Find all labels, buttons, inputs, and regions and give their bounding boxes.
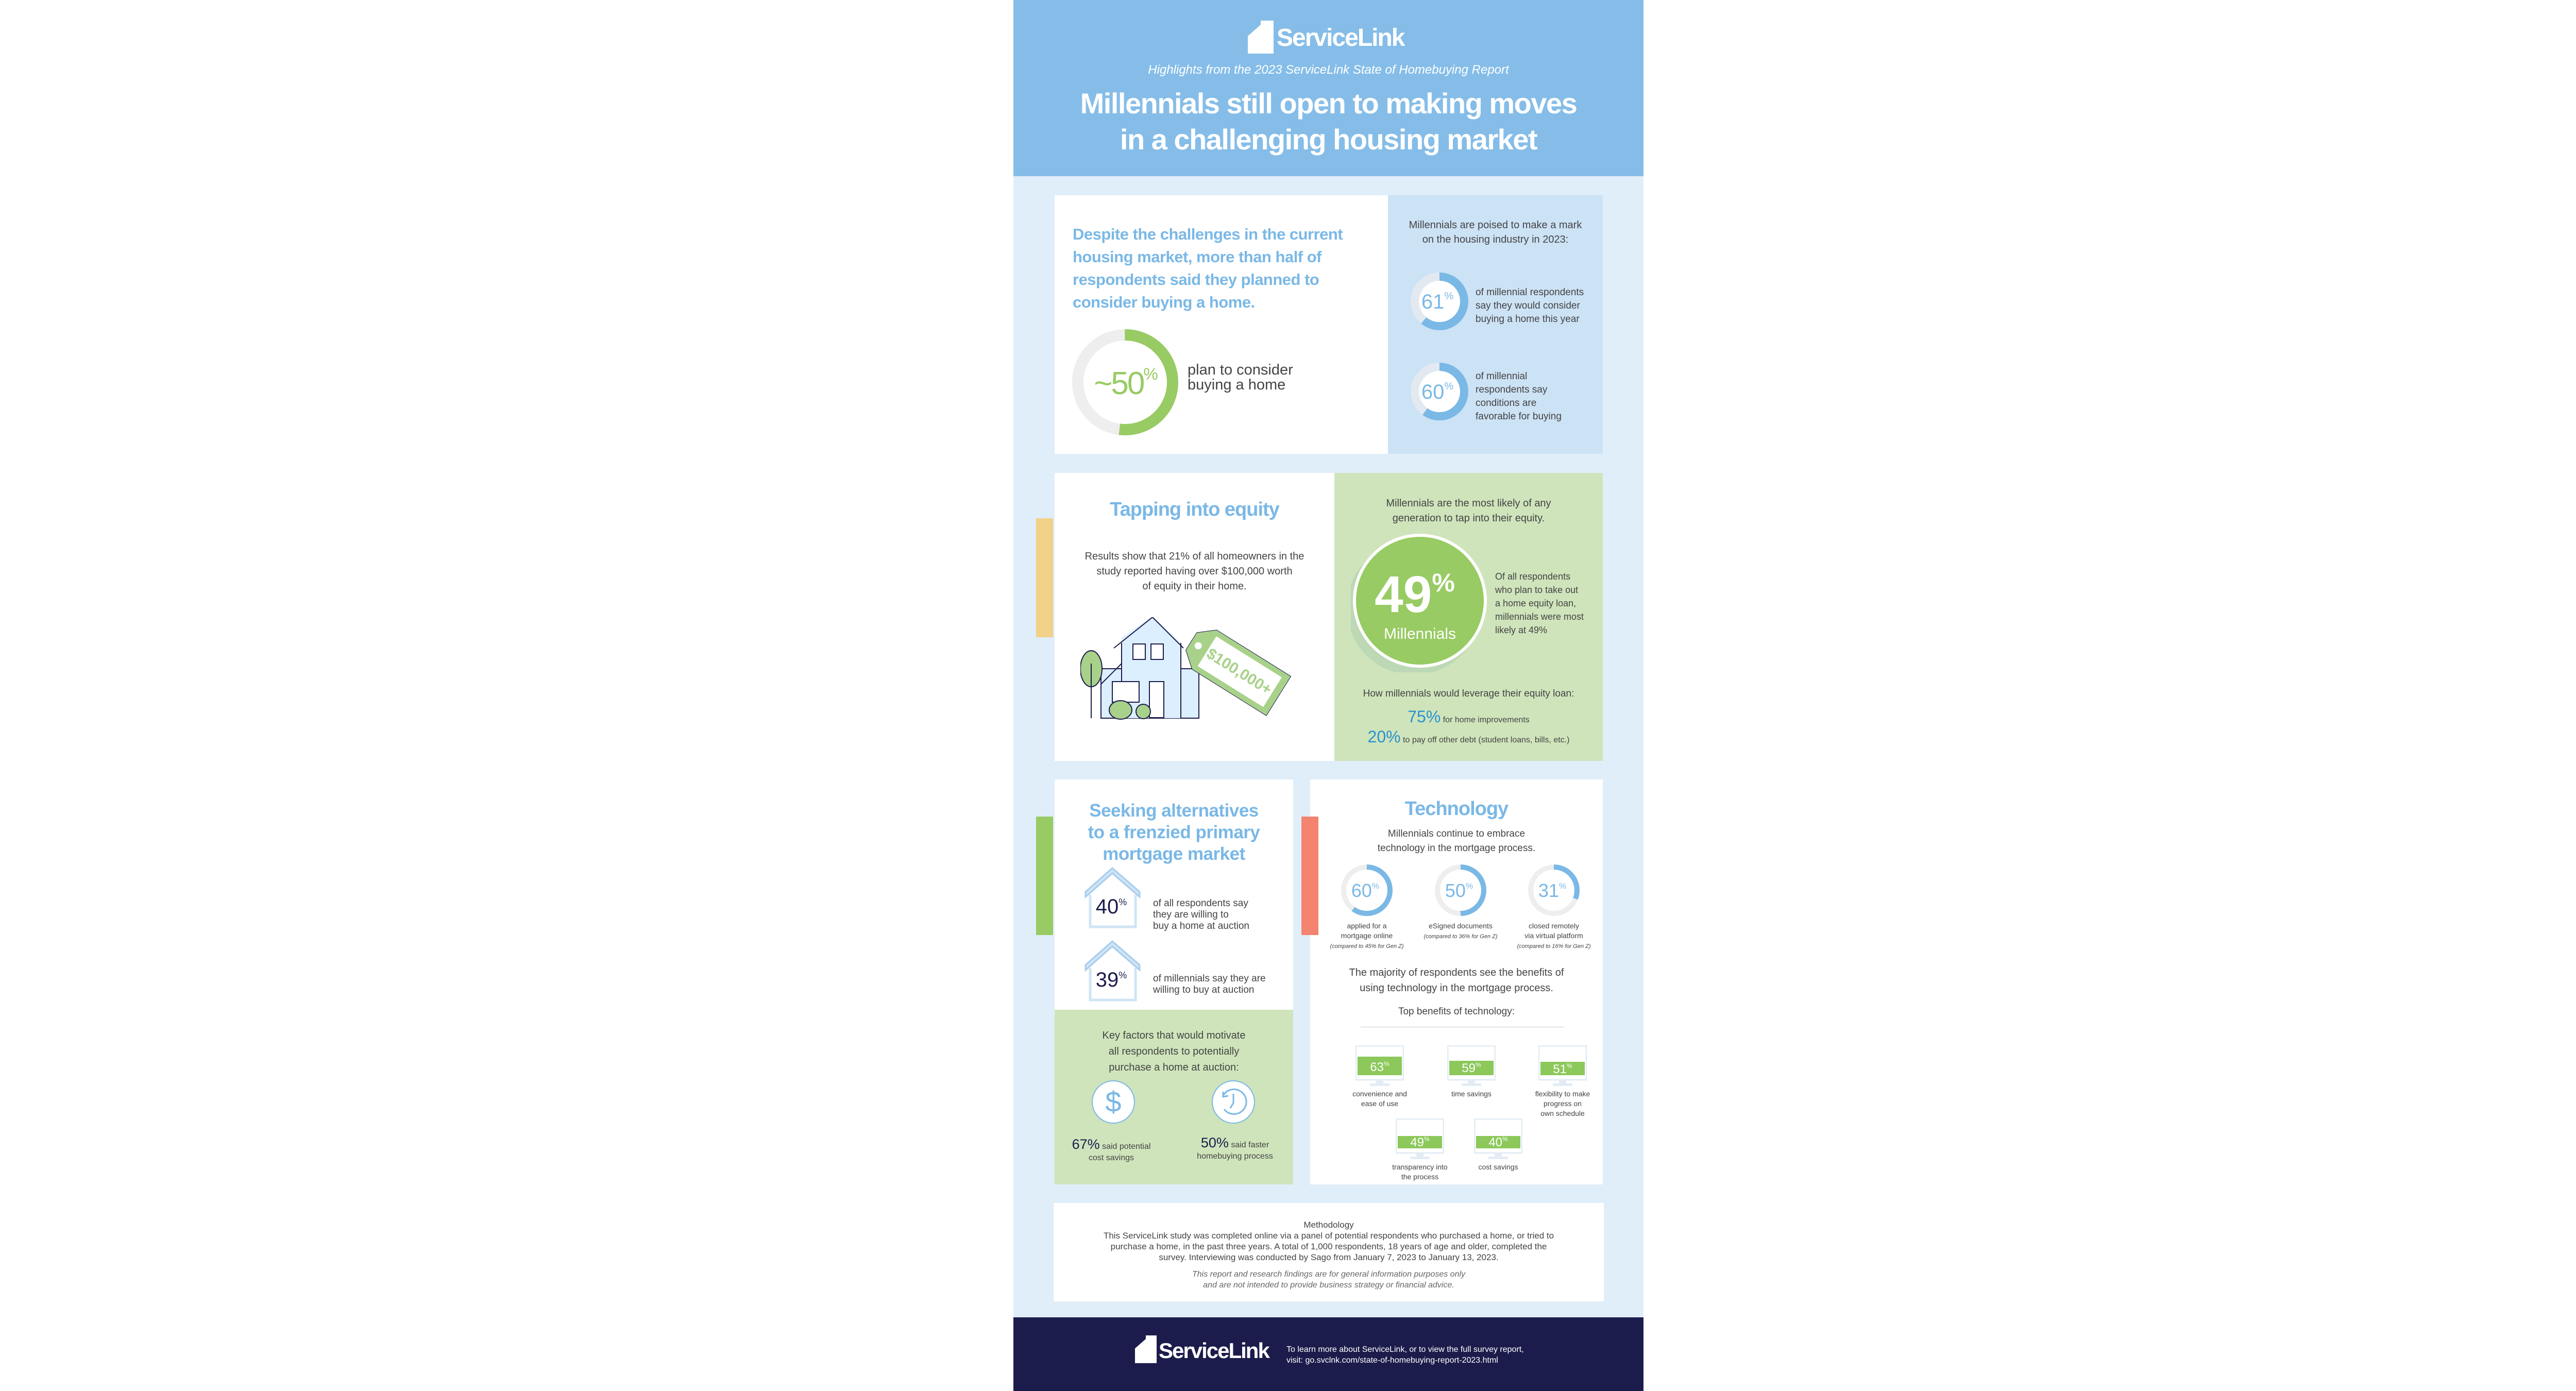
panel: consider buying bbox=[1055, 195, 1388, 454]
title bbox=[1080, 87, 1577, 156]
stat 60% bbox=[1411, 363, 1562, 422]
stat 75%: 75% for home improvements bbox=[1408, 707, 1530, 726]
stat 67% bbox=[1072, 1136, 1150, 1162]
donut 31%: via virtual platform bbox=[1524, 931, 1583, 940]
donut 50%: 50 bbox=[1445, 880, 1466, 901]
intro text bbox=[1409, 219, 1582, 245]
stat 50%: homebuying process bbox=[1197, 1152, 1273, 1161]
heading bbox=[1088, 801, 1260, 864]
donut: ~50% bbox=[1072, 329, 1178, 435]
benefit 63%: % bbox=[1384, 1060, 1389, 1067]
heading: Despite the challenges in the current bbox=[1073, 225, 1343, 243]
benefit 51%: % bbox=[1567, 1062, 1572, 1070]
methodology text: purchase a home, in the past three years. A total of 1,000 respondents, 18 years of age and older, completed the bbox=[1111, 1242, 1547, 1251]
benefit 49%: 49 bbox=[1410, 1135, 1424, 1149]
donut 60% bbox=[1330, 864, 1404, 949]
side text: likely at 49% bbox=[1495, 625, 1547, 635]
panel: seeking alternatives bbox=[1055, 779, 1293, 1184]
logo bbox=[1248, 21, 1405, 54]
benefit 40%: 40 bbox=[1488, 1135, 1502, 1149]
key factors text: all respondents to potentially bbox=[1109, 1046, 1239, 1057]
benefit 63%: 63 bbox=[1370, 1060, 1384, 1074]
intro text: on the housing industry in 2023: bbox=[1422, 234, 1568, 245]
majority text: The majority of respondents see the benefits of bbox=[1349, 967, 1564, 978]
key factors text bbox=[1103, 1030, 1245, 1073]
heading: housing market, more than half of bbox=[1073, 248, 1321, 266]
donut: ~50%: ~50 bbox=[1094, 366, 1143, 401]
intro bbox=[1378, 828, 1535, 854]
benefit 59%: time savings bbox=[1451, 1090, 1492, 1098]
benefit 40%: cost savings bbox=[1478, 1163, 1518, 1171]
stat 39%: of millennials say they are bbox=[1153, 973, 1266, 984]
panel: tapping into equity bbox=[1055, 473, 1334, 761]
benefit 59%: % bbox=[1476, 1061, 1481, 1068]
illustration: house with price tag: $100,000+ bbox=[1204, 645, 1275, 699]
top benefits heading: Top benefits of technology: bbox=[1398, 1006, 1515, 1017]
paragraph: Results show that 21% of all homeowners in the bbox=[1085, 551, 1304, 562]
heading: respondents said they planned to bbox=[1073, 270, 1319, 289]
panel: millennials poised bbox=[1388, 195, 1603, 454]
intro bbox=[1386, 498, 1551, 524]
leverage heading: How millennials would leverage their equity loan: bbox=[1363, 688, 1574, 699]
heading bbox=[1073, 225, 1343, 311]
benefit 59%: 59 bbox=[1462, 1061, 1476, 1075]
side text: who plan to take out bbox=[1495, 585, 1578, 595]
subtitle: Highlights from the 2023 ServiceLink State of Homebuying Report bbox=[1148, 63, 1509, 77]
benefit 40%: % bbox=[1502, 1135, 1508, 1143]
illustration: house with price tag bbox=[1080, 617, 1291, 720]
donut 60%: 60 bbox=[1351, 880, 1372, 901]
stat 67%: 67% said potential bbox=[1072, 1136, 1150, 1152]
stat 60%: of millennial bbox=[1476, 371, 1527, 382]
benefit 49% bbox=[1392, 1118, 1448, 1181]
text: plan to consider bbox=[1188, 362, 1293, 393]
stat 40% bbox=[1085, 867, 1249, 931]
stat 40%: they are willing to bbox=[1153, 909, 1229, 920]
big circle 49%: Millennials bbox=[1384, 625, 1456, 642]
text: plan to consider: buying a home bbox=[1188, 377, 1285, 393]
donut 60%: % bbox=[1372, 882, 1379, 891]
paragraph: study reported having over $100,000 worth bbox=[1096, 566, 1293, 577]
stat 60%: favorable for buying bbox=[1476, 411, 1562, 422]
key factors text: Key factors that would motivate bbox=[1103, 1030, 1245, 1041]
benefit 51%: progress on bbox=[1544, 1099, 1582, 1108]
benefit 63%: ease of use bbox=[1361, 1099, 1398, 1108]
title: in a challenging housing market bbox=[1120, 123, 1537, 156]
donut 31%: closed remotely bbox=[1529, 922, 1579, 930]
stat 67%: cost savings bbox=[1089, 1153, 1134, 1162]
paragraph: of equity in their home. bbox=[1142, 581, 1247, 592]
donut 31% bbox=[1517, 864, 1591, 949]
footer text bbox=[1286, 1344, 1524, 1366]
paragraph bbox=[1085, 551, 1304, 592]
stat 39%: % bbox=[1118, 970, 1127, 980]
donut 31%: % bbox=[1559, 882, 1566, 891]
side text: Of all respondents bbox=[1495, 571, 1570, 582]
header bbox=[1013, 0, 1643, 176]
donut 50%: eSigned documents bbox=[1429, 922, 1493, 930]
benefit 63% bbox=[1352, 1045, 1407, 1108]
methodology text: Methodology bbox=[1303, 1220, 1354, 1230]
majority text bbox=[1349, 967, 1564, 994]
donut 60%: (compared to 45% for Gen Z) bbox=[1330, 943, 1404, 949]
title: Millennials still open to making moves bbox=[1080, 87, 1577, 120]
stat 40%: buy a home at auction bbox=[1153, 921, 1249, 931]
donut 50% bbox=[1423, 864, 1498, 940]
benefit 59% bbox=[1447, 1045, 1496, 1098]
disclaimer bbox=[1054, 1269, 1604, 1291]
stat 50% bbox=[1197, 1135, 1273, 1161]
heading: mortgage market bbox=[1103, 844, 1245, 864]
side text: millennials were most bbox=[1495, 612, 1584, 622]
stat 60%: conditions are bbox=[1476, 398, 1536, 409]
icon: clock bbox=[1212, 1080, 1255, 1124]
heading: Technology bbox=[1405, 798, 1508, 820]
icon: dollar: $ bbox=[1105, 1085, 1122, 1118]
benefit 51%: 51 bbox=[1553, 1062, 1567, 1076]
footer text: visit: go.svclnk.com/state-of-homebuying-report-2023.html bbox=[1286, 1356, 1498, 1365]
benefit 51%: flexibility to make bbox=[1535, 1090, 1590, 1098]
stat 61%: 61 bbox=[1421, 291, 1444, 313]
panel: technology bbox=[1310, 779, 1603, 1184]
footer bbox=[1013, 1317, 1643, 1391]
benefit 63%: convenience and bbox=[1352, 1090, 1407, 1098]
stat 39%: willing to buy at auction bbox=[1153, 985, 1254, 995]
disclaimer: and are not intended to provide business strategy or financial advice. bbox=[1203, 1281, 1454, 1290]
stat 40%: 40 bbox=[1096, 895, 1118, 918]
benefit 49%: transparency into bbox=[1392, 1163, 1448, 1171]
intro: Millennials are the most likely of any bbox=[1386, 498, 1551, 509]
accent bar red bbox=[1301, 817, 1318, 935]
benefit 40% bbox=[1474, 1118, 1522, 1171]
accent bar green bbox=[1036, 817, 1053, 935]
intro text: Millennials are poised to make a mark bbox=[1409, 219, 1582, 231]
methodology text: survey. Interviewing was conducted by Sago from January 7, 2023 to January 13, 2023. bbox=[1159, 1252, 1499, 1262]
icon: dollar bbox=[1092, 1080, 1135, 1124]
donut 60%: applied for a bbox=[1347, 922, 1387, 930]
logo: ServiceLink bbox=[1277, 24, 1404, 52]
stat 61% bbox=[1411, 273, 1584, 330]
intro: technology in the mortgage process. bbox=[1378, 843, 1535, 854]
heading: Seeking alternatives bbox=[1089, 801, 1259, 821]
donut 31%: (compared to 16% for Gen Z) bbox=[1517, 943, 1591, 949]
key factors text: purchase a home at auction: bbox=[1109, 1062, 1239, 1073]
benefit 51%: own schedule bbox=[1540, 1109, 1585, 1117]
big circle 49%: 49 bbox=[1375, 566, 1432, 623]
donut 50%: (compared to 36% for Gen Z) bbox=[1423, 934, 1498, 940]
stat 61%: of millennial respondents bbox=[1476, 287, 1584, 298]
heading: Tapping into equity bbox=[1110, 499, 1279, 520]
donut: ~50%: % bbox=[1143, 365, 1158, 383]
stat 61%: buying a home this year bbox=[1476, 314, 1580, 325]
footer logo bbox=[1135, 1335, 1269, 1366]
stat 40%: of all respondents say bbox=[1153, 898, 1248, 909]
donut 50%: % bbox=[1466, 882, 1473, 891]
text: plan to consider: plan to consider bbox=[1188, 362, 1293, 378]
stat 60%: respondents say bbox=[1476, 384, 1547, 395]
stat 61%: % bbox=[1444, 291, 1453, 302]
heading: to a frenzied primary bbox=[1088, 822, 1260, 842]
stat 39% bbox=[1085, 940, 1266, 1002]
majority text: using technology in the mortgage process. bbox=[1360, 982, 1553, 994]
benefit 49%: % bbox=[1424, 1135, 1430, 1143]
disclaimer: This report and research findings are for general information purposes only bbox=[1192, 1270, 1465, 1279]
stat 60%: % bbox=[1444, 381, 1453, 392]
big circle 49%: % bbox=[1432, 568, 1455, 597]
accent bar yellow bbox=[1036, 518, 1053, 637]
stat 50%: 50% said faster bbox=[1201, 1135, 1269, 1150]
stat 61%: say they would consider bbox=[1476, 300, 1580, 311]
footer text: To learn more about ServiceLink, or to view the full survey report, bbox=[1286, 1345, 1524, 1354]
methodology text: This ServiceLink study was completed online via a panel of potential respondents who purchased a home, or tried to bbox=[1104, 1231, 1554, 1241]
intro: generation to tap into their equity. bbox=[1393, 513, 1545, 524]
panel: millennials 49% bbox=[1334, 473, 1603, 761]
stat 39%: 39 bbox=[1096, 969, 1118, 991]
side text bbox=[1495, 571, 1584, 635]
donut 31%: 31 bbox=[1538, 880, 1559, 901]
big circle 49% bbox=[1351, 534, 1487, 672]
intro: Millennials continue to embrace bbox=[1388, 828, 1525, 839]
heading: consider buying a home. bbox=[1073, 293, 1255, 311]
stat 40%: % bbox=[1118, 897, 1127, 907]
side text: a home equity loan, bbox=[1495, 598, 1576, 608]
donut 60%: mortgage online bbox=[1341, 931, 1393, 940]
stat 60%: 60 bbox=[1421, 381, 1444, 403]
benefit 49%: the process bbox=[1401, 1173, 1438, 1181]
benefit 51% bbox=[1535, 1045, 1590, 1117]
footer logo: ServiceLink bbox=[1159, 1338, 1269, 1363]
methodology text bbox=[1064, 1219, 1594, 1263]
stat 20%: 20% to pay off other debt (student loans, bills, etc.) bbox=[1368, 727, 1569, 746]
subpanel: key factors bbox=[1055, 1010, 1293, 1184]
panel: methodology bbox=[1054, 1203, 1604, 1301]
